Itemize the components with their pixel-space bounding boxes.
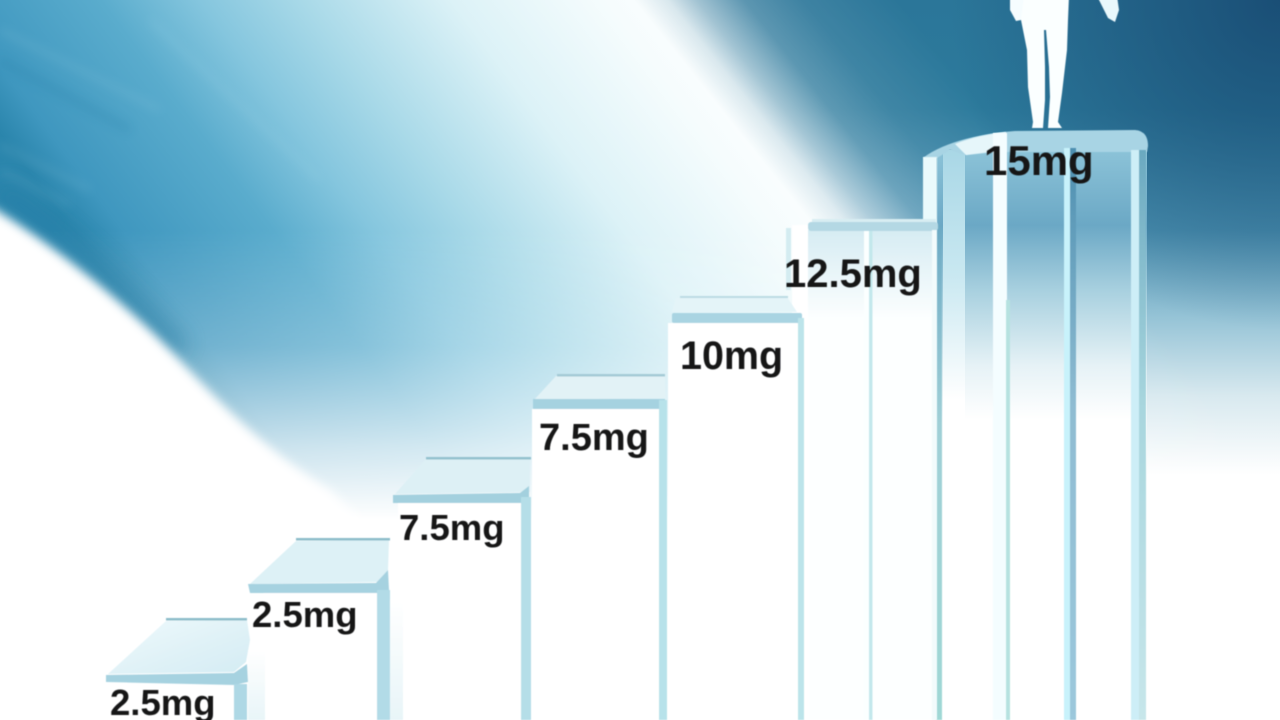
top surface: [395, 458, 530, 494]
step 6: 12.5mg: [786, 219, 938, 720]
front face: [532, 409, 659, 720]
white curved hill at lower left: [0, 200, 560, 720]
label: 15mg: 15mg: [984, 137, 1094, 184]
step 1: 2.5mg: [106, 618, 265, 720]
label: 10mg: 10mg: [680, 334, 783, 378]
top surface: [923, 130, 1148, 158]
back line: [557, 374, 665, 376]
front band: [672, 313, 802, 323]
right edge: [521, 497, 531, 720]
front band: [393, 486, 529, 503]
top surface: [672, 297, 797, 312]
right edge: [932, 230, 937, 720]
right edge: [798, 318, 804, 720]
back line: [296, 538, 390, 540]
inner edge: [864, 231, 869, 720]
front face: [668, 323, 797, 720]
front band: [248, 570, 389, 593]
front face: [808, 230, 936, 720]
front band: [106, 664, 248, 685]
top surface: [250, 540, 389, 584]
ghost edge: [390, 600, 403, 720]
label: 7.5mg second: 7.5mg: [539, 417, 649, 459]
label: 2.5mg second: 2.5mg: [252, 594, 358, 635]
step 3: 7.5mg: [393, 457, 531, 720]
top surface: [534, 376, 665, 400]
back line: [680, 296, 788, 298]
right edge: [377, 590, 390, 720]
ghost edge: [248, 650, 265, 720]
back line: [426, 457, 531, 460]
dose labels: [110, 137, 1094, 720]
label: 12.5mg: 12.5mg: [784, 252, 922, 296]
right edge: [659, 400, 667, 720]
vertical edges: [936, 133, 1146, 720]
right edge: [234, 684, 247, 720]
pillar: 15mg top step: [923, 130, 1148, 720]
left hand: [1010, 0, 1024, 21]
glass body: [937, 150, 1147, 720]
right hand: [1097, 0, 1119, 22]
top lip: [808, 222, 938, 231]
back ghost edge: [786, 228, 791, 290]
front face: [264, 593, 377, 720]
front band: [533, 399, 665, 409]
step 4: 7.5mg: [532, 374, 667, 720]
back line: [166, 618, 247, 620]
background: gradient with light beam: [0, 0, 1280, 508]
step 2: 2.5mg: [248, 538, 403, 720]
figure: white human silhouette standing on top step: [1010, 0, 1119, 128]
step 5: 10mg: [668, 296, 804, 720]
top surface: [108, 620, 250, 674]
front face: [398, 503, 521, 720]
legs: [1021, 0, 1069, 128]
label: 7.5mg: 7.5mg: [399, 507, 504, 548]
left front pillar: [923, 157, 937, 225]
